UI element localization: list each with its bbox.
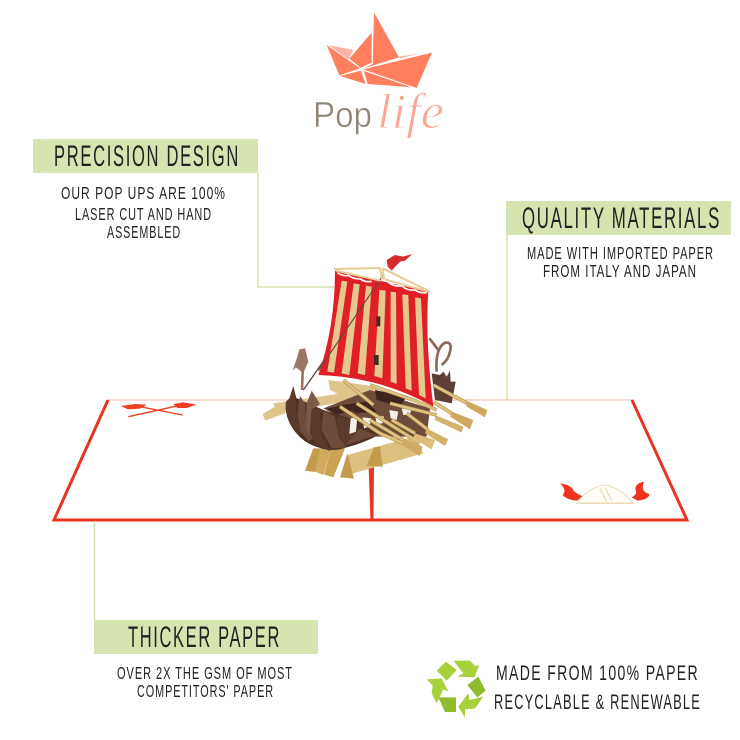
callout: quality materials [506, 201, 731, 400]
card top edge [108, 399, 633, 401]
body text [117, 663, 293, 701]
back planks under sail [263, 380, 380, 421]
hull [286, 386, 378, 451]
figurehead [293, 348, 308, 390]
body text: ASSEMBLED [107, 222, 181, 242]
connector line [94, 521, 96, 620]
sail clips [374, 316, 380, 365]
body text: COMPETITORS' PAPER [137, 681, 274, 701]
icon: crossed axes [121, 402, 197, 417]
logo: Poplife [313, 12, 444, 139]
callout: precision design [33, 139, 334, 287]
yard frame [334, 268, 430, 292]
icon: origami paper boat [327, 12, 432, 88]
callout: thicker paper [94, 521, 318, 701]
yard scallops [337, 273, 427, 293]
mast rope [303, 276, 383, 390]
recycling text [494, 662, 701, 714]
recycling note [427, 661, 701, 718]
heading bar [506, 201, 731, 235]
heading: THICKER PAPER [128, 621, 281, 654]
white shields [349, 408, 412, 434]
icon: recycle symbol [427, 661, 486, 718]
body text: OVER 2X THE GSM OF MOST [117, 663, 293, 683]
ship stand [305, 437, 423, 479]
flag [387, 254, 412, 271]
deck [323, 390, 430, 437]
heading bar [94, 620, 318, 654]
mast rope over sail [318, 276, 383, 371]
stern post [429, 338, 451, 372]
card red border [54, 400, 687, 520]
connector line [506, 235, 508, 400]
stern hull [432, 371, 456, 403]
sail stripes [327, 281, 426, 398]
logo word: life: life [377, 83, 444, 139]
body text [61, 183, 226, 242]
body text: OUR POP UPS ARE 100% [61, 183, 226, 203]
pop-up viking ship [263, 254, 487, 479]
dark seats [327, 390, 407, 415]
logo word: Pop: Pop [313, 94, 372, 135]
heading: PRECISION DESIGN [54, 140, 240, 173]
heading bar [33, 139, 258, 173]
connector line [258, 173, 334, 287]
sail [318, 271, 433, 407]
card centre fold [368, 463, 374, 521]
body text [527, 243, 714, 281]
icon: viking helmet [560, 482, 649, 503]
body text: LASER CUT AND HAND [75, 204, 212, 224]
oars [340, 380, 487, 456]
open pop-up card [54, 400, 687, 521]
